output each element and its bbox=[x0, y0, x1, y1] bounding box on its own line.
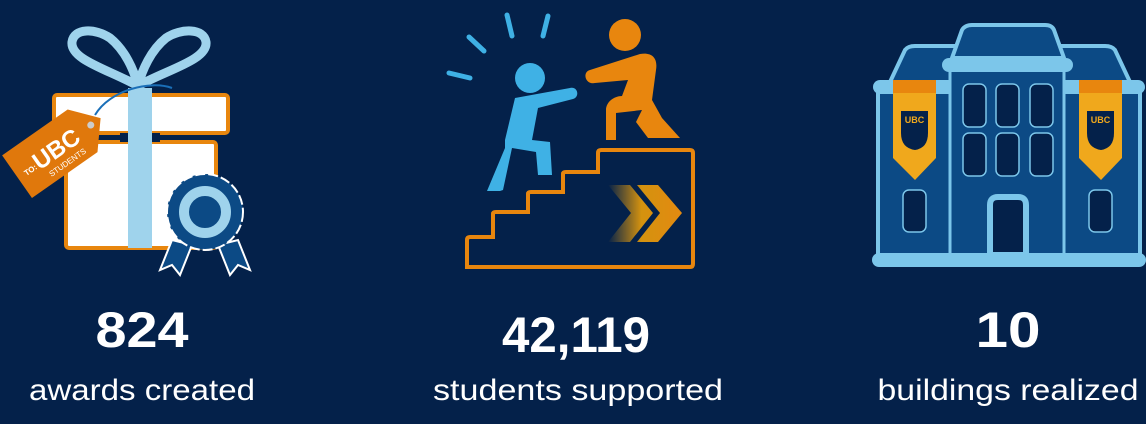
tag bbox=[2, 97, 116, 198]
chevrons bbox=[608, 185, 682, 242]
box lid bbox=[54, 95, 228, 133]
door bbox=[990, 197, 1026, 255]
rosette bbox=[160, 174, 250, 275]
tag: UBC bbox=[28, 124, 86, 176]
base bbox=[872, 253, 1146, 267]
icon: building bbox=[872, 25, 1146, 267]
tag: STUDENTS bbox=[47, 147, 88, 179]
stat: awards: awards created bbox=[29, 374, 255, 407]
central block bbox=[950, 68, 1064, 255]
windows bbox=[903, 84, 1112, 232]
stat: students: students supported bbox=[433, 374, 723, 407]
banners: UBC bbox=[905, 115, 925, 125]
blue person bbox=[487, 63, 577, 191]
icon: gift bbox=[2, 31, 250, 275]
banners bbox=[893, 80, 1122, 180]
bow bbox=[72, 31, 206, 86]
top roof bbox=[952, 25, 1064, 58]
stat: students: 42,119 bbox=[502, 307, 650, 363]
ribbon bbox=[128, 88, 152, 248]
icon: stairs helping hand bbox=[449, 15, 693, 267]
stat: students bbox=[433, 307, 723, 407]
stat: buildings: 10 bbox=[976, 302, 1040, 358]
tag: TO: bbox=[22, 163, 39, 178]
orange person bbox=[585, 19, 680, 140]
rays bbox=[449, 15, 548, 78]
stat: buildings: buildings realized bbox=[878, 374, 1138, 407]
box body bbox=[66, 142, 216, 248]
stat: buildings bbox=[878, 302, 1138, 407]
stat: awards bbox=[29, 302, 255, 407]
stat: awards: 824 bbox=[96, 302, 189, 358]
side roof bbox=[890, 46, 1130, 82]
banners: UBC bbox=[1091, 115, 1111, 125]
wings body bbox=[878, 88, 1140, 255]
stair outline bbox=[467, 150, 693, 267]
